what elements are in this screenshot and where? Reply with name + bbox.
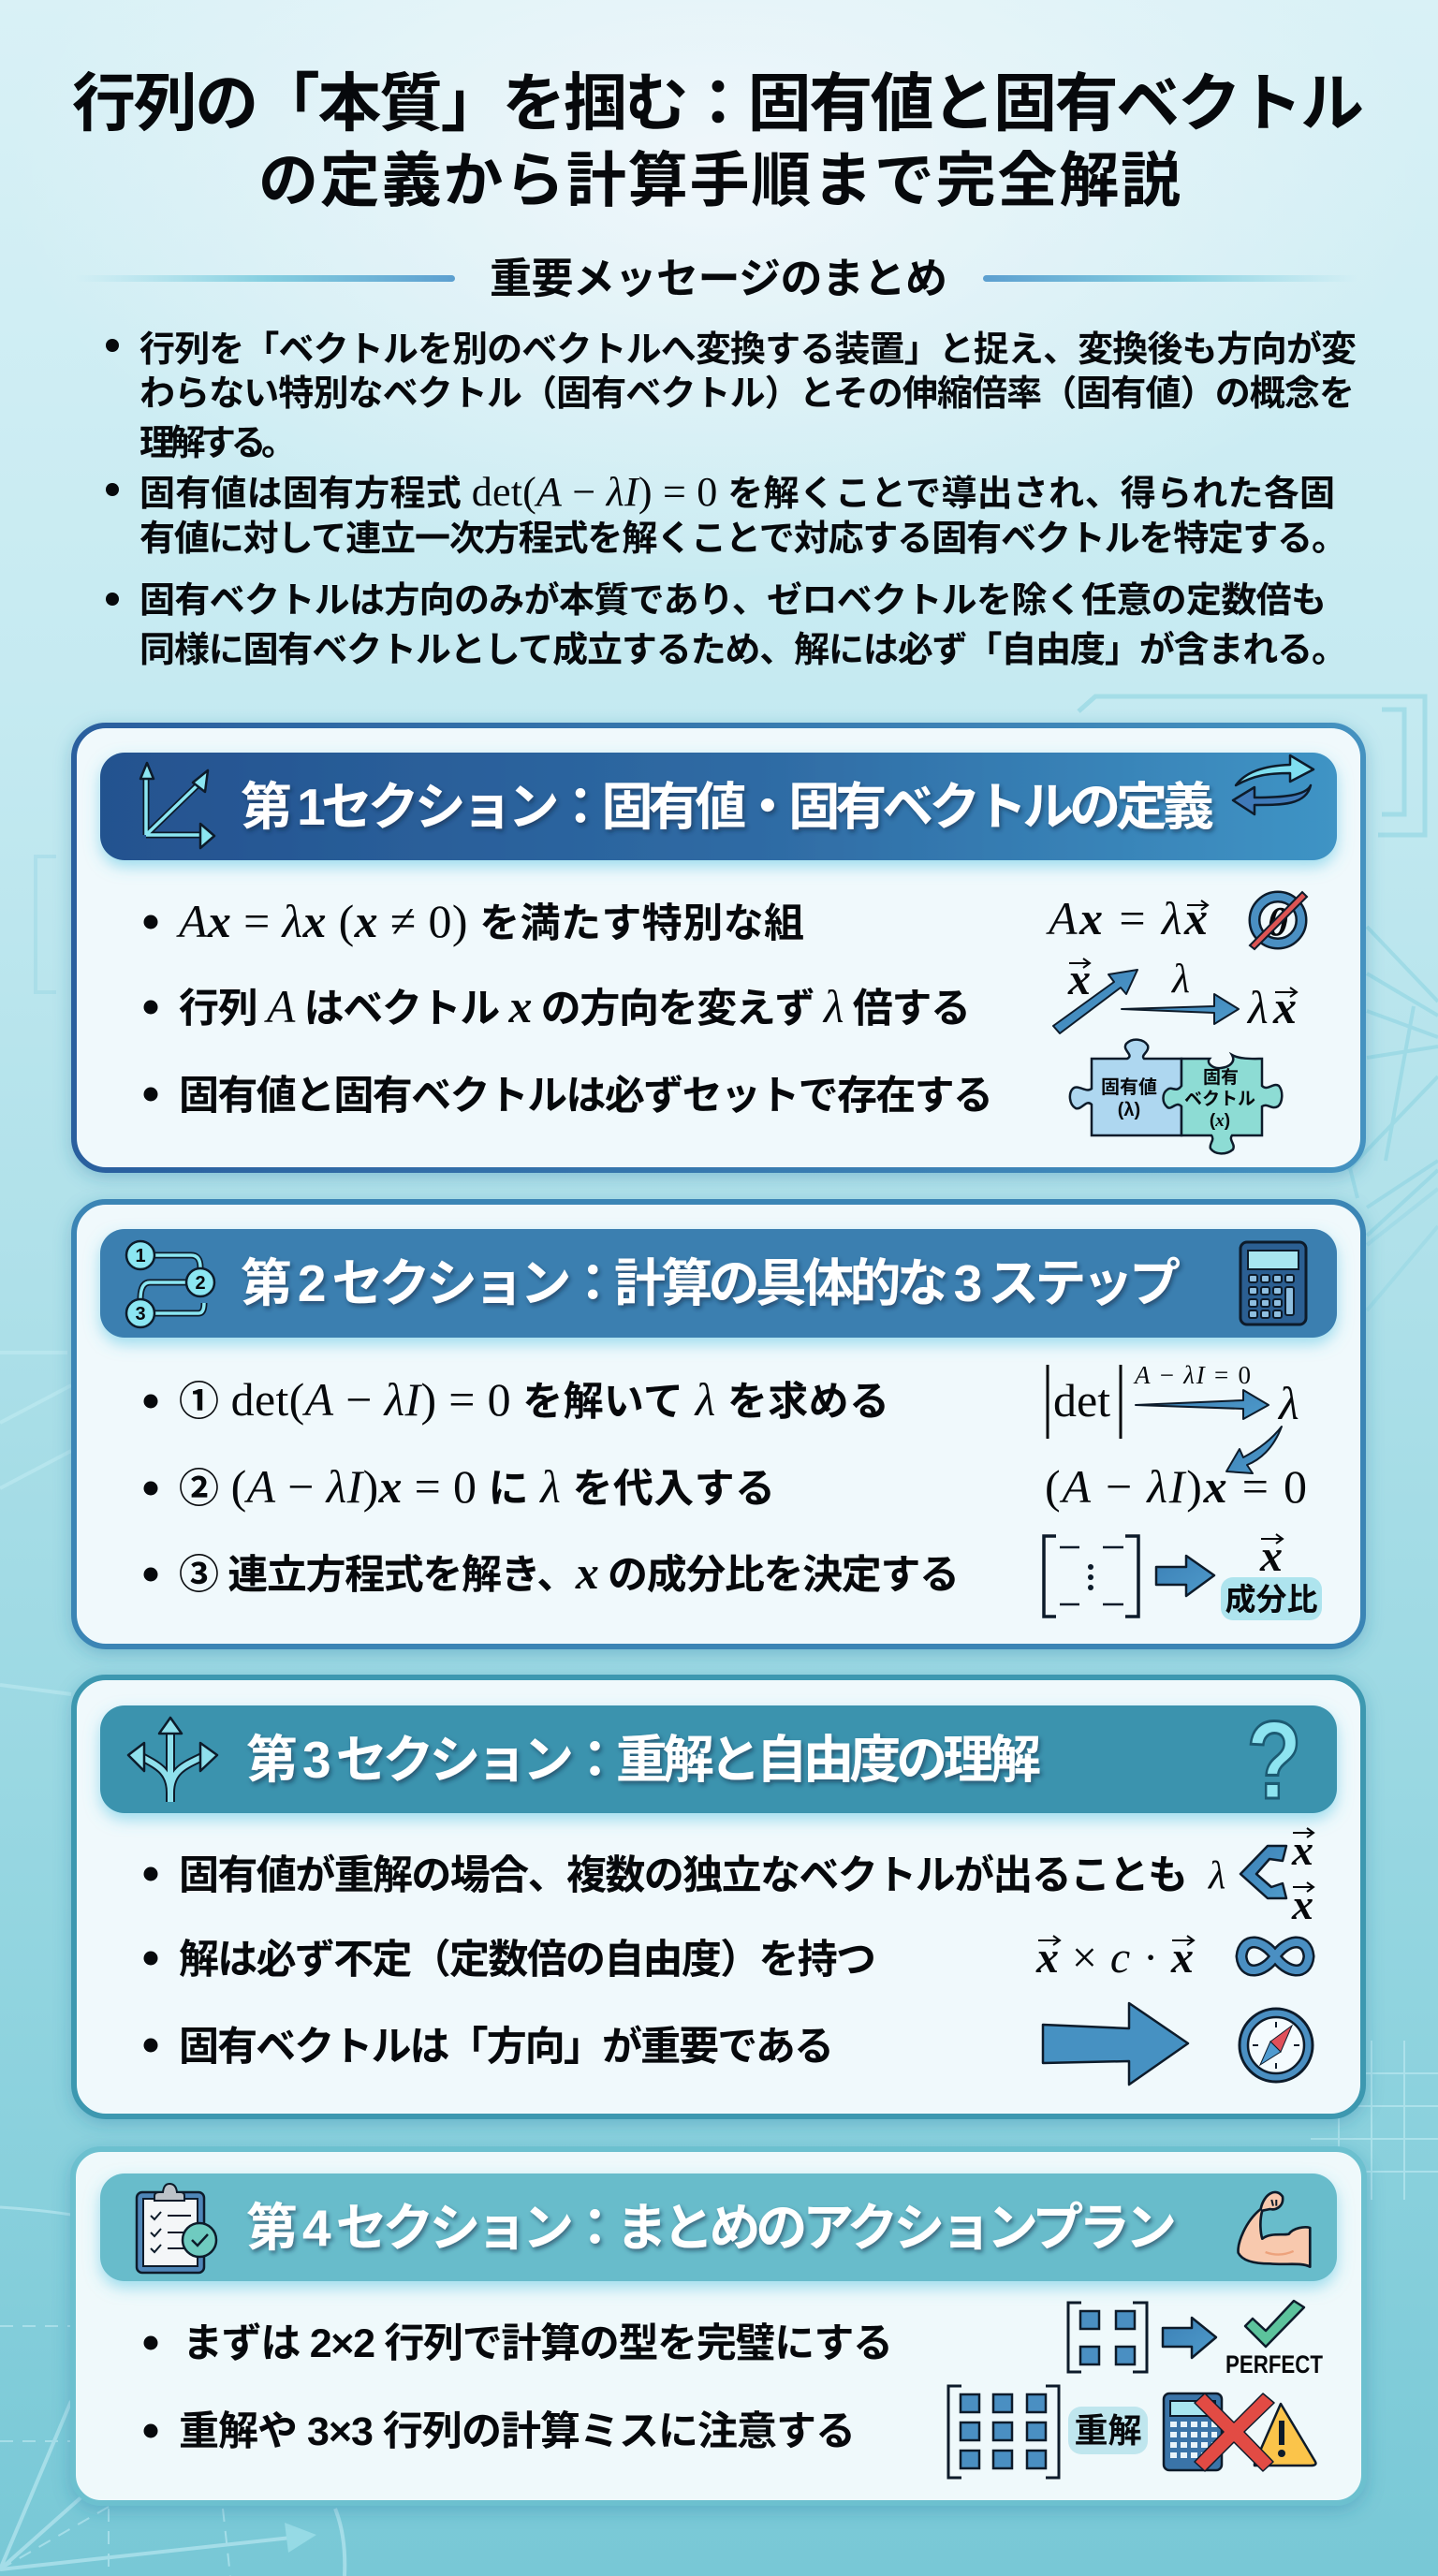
icon: flexed arm bbox=[1239, 2192, 1310, 2267]
section 1 header bar bbox=[100, 753, 1337, 860]
icon: calculator small bbox=[1164, 2393, 1222, 2470]
background decoration: tech frames and network lines bbox=[0, 696, 1438, 2576]
summary bullets: 理解する。 bbox=[139, 424, 297, 463]
icon: compass bbox=[1240, 2009, 1313, 2082]
icon: branching arrows bbox=[128, 1718, 217, 1802]
step 3 text: ③ 連立方程式を解き、x の成分比を決定する bbox=[179, 1547, 960, 1599]
card background 4 bbox=[73, 2149, 1364, 2503]
icon: puzzle pieces: 固有値 bbox=[1101, 1076, 1157, 1098]
icon: puzzle pieces bbox=[1070, 1040, 1282, 1153]
diagram: lambda branching to two vectors: x bbox=[1291, 1881, 1313, 1928]
icon: big direction arrow bbox=[1043, 2003, 1188, 2085]
summary heading with rules: 重要メッセージのまとめ bbox=[490, 255, 947, 302]
summary heading with rules bbox=[75, 255, 1357, 302]
icon: numbered flow: 3 bbox=[135, 1304, 146, 1325]
icon: question mark: ? bbox=[1246, 1698, 1302, 1822]
section 2 heading: 第 2 セクション：計算の具体的な 3 ステップ bbox=[241, 1254, 1181, 1312]
diagram: vector scaling bbox=[1053, 955, 1297, 1033]
step 1 text: ① det(A − λI) = 0 を解いて λ を求める bbox=[179, 1374, 889, 1426]
icon: puzzle pieces: (λ) bbox=[1118, 1100, 1140, 1120]
icon: calculator bbox=[1240, 1242, 1306, 1325]
diagram: 3x3 matrix warning: 重解 bbox=[1074, 2411, 1142, 2450]
diagram: vector scaling: λ bbox=[1170, 956, 1190, 1002]
icon: clipboard bbox=[137, 2184, 216, 2273]
panel: section 3 multiplicity bbox=[74, 1677, 1363, 2116]
summary bullets: 行列を「ベクトルを別のベクトルへ変換する装置」と捉え、変換後も方向が変 bbox=[139, 330, 1357, 370]
diagram: 2x2 matrix to perfect: PERFECT bbox=[1225, 2350, 1323, 2378]
panel: section 4 action plan bbox=[73, 2149, 1364, 2503]
row 2 text: 重解や 3×3 行列の計算ミスに注意する bbox=[179, 2409, 856, 2454]
icon: non-zero bbox=[1250, 892, 1307, 949]
summary bullets: わらない特別なベクトル（固有ベクトル）とその伸縮倍率（固有値）の概念を bbox=[139, 374, 1355, 414]
card background 3 bbox=[74, 1677, 1363, 2116]
icon: non-zero: 0 bbox=[1268, 899, 1288, 944]
diagram: det to lambda bbox=[1048, 1361, 1299, 1473]
step 2 text: ② (A − λI)x = 0 に λ を代入する bbox=[179, 1461, 775, 1513]
section 1 heading: 第 1セクション：固有値・固有ベクトルの定義 bbox=[241, 778, 1214, 836]
diagram: det to lambda: A − λI = 0 bbox=[1133, 1361, 1251, 1389]
summary bullets: 同様に固有ベクトルとして成立するため、解には必ず「自由度」が含まれる。 bbox=[139, 631, 1347, 670]
diagram: det to lambda: det bbox=[1053, 1374, 1110, 1427]
row 2 text: 行列 A はベクトル x の方向を変えず λ 倍する bbox=[179, 981, 971, 1032]
diagram: vector scaling: λx bbox=[1246, 981, 1297, 1033]
diagram: 3x3 matrix warning bbox=[948, 2386, 1315, 2478]
diagram: det to lambda: λ bbox=[1277, 1377, 1299, 1429]
row 2 text: 解は必ず不定（定数倍の自由度）を持つ bbox=[179, 1938, 876, 1983]
icon: puzzle pieces: ベクトル bbox=[1184, 1089, 1255, 1109]
section 4 header bar bbox=[100, 2174, 1337, 2281]
panel: section 1 definition bbox=[74, 725, 1363, 1170]
icon: axes vectors bbox=[140, 763, 214, 848]
formula: Ax = lambda x: Ax = λx bbox=[1046, 892, 1208, 944]
diagram: matrix to component ratio bbox=[1044, 1531, 1322, 1620]
formula: constant multiple: x × c · x bbox=[1035, 1933, 1194, 1983]
icon: cycle arrows bbox=[1233, 755, 1313, 814]
diagram: vector scaling: x bbox=[1067, 955, 1091, 1004]
title: 行列の「本質」を掴む：固有値と固有ベクトル bbox=[72, 68, 1364, 139]
diagram: matrix to component ratio: 成分比 bbox=[1225, 1582, 1318, 1617]
section 4 heading: 第 4 セクション：まとめのアクションプラン bbox=[246, 2199, 1177, 2257]
icon: infinity bbox=[1241, 1942, 1309, 1970]
diagram: matrix to component ratio: x bbox=[1259, 1531, 1283, 1581]
card background 1 bbox=[74, 725, 1363, 1170]
panel: section 2 steps bbox=[74, 1202, 1363, 1647]
summary bullets: 固有ベクトルは方向のみが本質であり、ゼロベクトルを除く任意の定数倍も bbox=[139, 581, 1327, 621]
row 3 text: 固有ベクトルは「方向」が重要である bbox=[179, 2025, 834, 2070]
section 3 heading: 第 3 セクション：重解と自由度の理解 bbox=[246, 1731, 1041, 1789]
icon: puzzle pieces: 固有 bbox=[1203, 1067, 1239, 1088]
card background 2 bbox=[74, 1202, 1363, 1647]
summary bullets bbox=[106, 330, 1357, 670]
row 1 text: 固有値が重解の場合、複数の独立なベクトルが出ることも bbox=[179, 1853, 1188, 1898]
section 2 header bar bbox=[100, 1229, 1337, 1338]
row 1 text: Ax = λx (x ≠ 0) を満たす特別な組 bbox=[176, 896, 804, 947]
icon: warning triangle bbox=[1255, 2404, 1315, 2466]
formula: substitution: (A − λI)x = 0 bbox=[1045, 1460, 1307, 1513]
row 1 text: まずは 2×2 行列で計算の型を完璧にする bbox=[183, 2321, 893, 2366]
icon: red cross bbox=[1195, 2393, 1274, 2471]
diagram: 2x2 matrix to perfect bbox=[1068, 2301, 1323, 2378]
diagram: lambda branching to two vectors bbox=[1207, 1826, 1313, 1928]
section 3 header bar bbox=[100, 1705, 1337, 1813]
diagram: lambda branching to two vectors: λ bbox=[1207, 1854, 1225, 1897]
diagram: lambda branching to two vectors: x bbox=[1291, 1826, 1313, 1874]
icon: numbered flow: 2 bbox=[195, 1273, 206, 1294]
icon: numbered flow: 1 bbox=[135, 1246, 146, 1266]
title: の定義から計算手順まで完全解説 bbox=[258, 147, 1181, 214]
icon: numbered flow bbox=[126, 1241, 214, 1327]
title bbox=[72, 68, 1364, 214]
icon: puzzle pieces: (x) bbox=[1210, 1111, 1230, 1131]
summary bullets: 有値に対して連立一次方程式を解くことで対応する固有ベクトルを特定する。 bbox=[139, 520, 1347, 559]
summary bullets: 固有値は固有方程式 det(A − λI) = 0 を解くことで導出され、得られた各固 bbox=[139, 469, 1335, 515]
row 3 text: 固有値と固有ベクトルは必ずセットで存在する bbox=[179, 1074, 993, 1119]
